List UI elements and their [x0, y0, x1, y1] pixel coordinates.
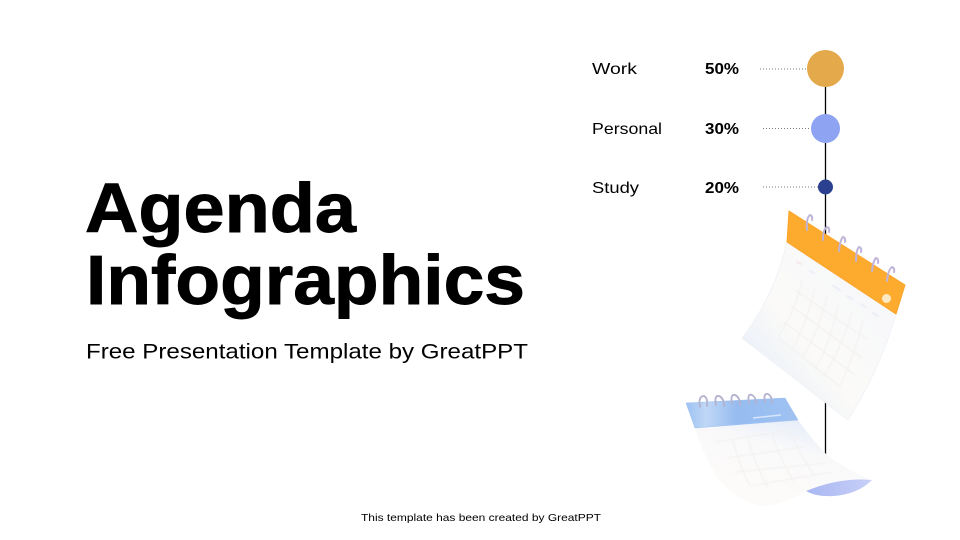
calendar grid	[715, 431, 832, 488]
binder rings	[807, 215, 894, 281]
row: Study 20%: Study	[592, 180, 639, 197]
row: Work 50%: 50%	[705, 61, 739, 78]
calendar page	[695, 420, 872, 506]
footer note: This template has been created by GreatPPT	[361, 512, 602, 524]
row: Work 50%: Work	[592, 61, 638, 78]
row: Personal 30%: 30%	[705, 121, 739, 138]
row: Personal 30%: Personal	[592, 121, 662, 138]
row: Study 20%: 20%	[705, 180, 739, 197]
calendar weekday chips	[797, 262, 878, 316]
title	[85, 169, 525, 319]
subtitle: Free Presentation Template by GreatPPT	[86, 340, 528, 364]
icon: blue calendar	[686, 394, 872, 506]
row: Work 50%	[592, 50, 844, 87]
icon: orange calendar	[742, 211, 905, 420]
calendar header	[686, 398, 798, 428]
purple underside	[806, 479, 872, 496]
row: Personal 30%	[592, 114, 840, 143]
calendar page	[742, 242, 896, 420]
binder rings	[700, 394, 772, 407]
calendar header	[787, 211, 905, 314]
row: Study 20%	[592, 180, 833, 197]
title: Agenda	[85, 169, 357, 247]
timeline axis line	[824, 68, 826, 455]
title: Infographics	[86, 241, 525, 319]
calendar grid	[778, 280, 868, 388]
